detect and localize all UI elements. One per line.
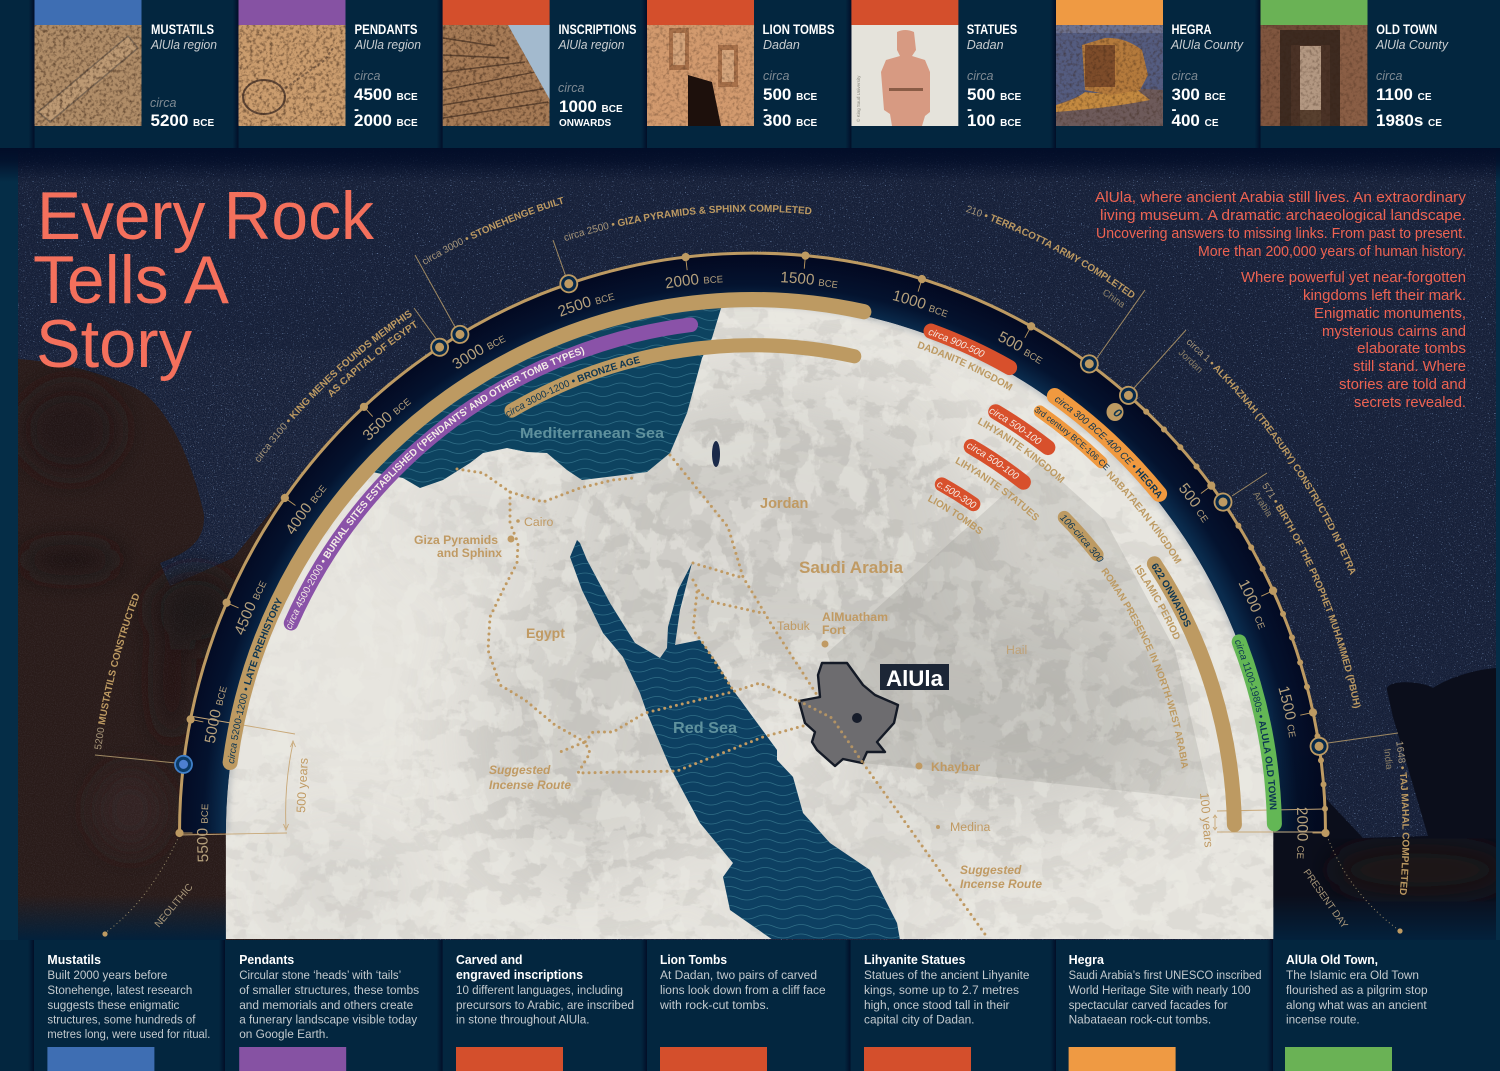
caption: Lihyanite Statues: capital city of Dadan. <box>864 1012 974 1026</box>
title <box>33 178 375 382</box>
route over region <box>799 701 863 763</box>
card: Lion Tombs: Dadan <box>763 38 800 52</box>
card: Hegra: HEGRA <box>1172 21 1212 37</box>
100 years scale marker <box>1197 792 1326 848</box>
era bar: Roman presence <box>1064 517 1097 555</box>
map labels: Suggested <box>489 763 551 777</box>
map labels: AlMuatham <box>822 610 888 624</box>
map labels: Jordan <box>760 496 808 512</box>
era bar labels: NABATAEAN KINGDOM <box>1104 470 1183 566</box>
caption: Pendants: Circular stone ‘heads’ with ‘tails’ <box>239 968 401 982</box>
photo: pendant <box>238 25 346 126</box>
year labels on band: 500 BCE <box>998 331 1043 364</box>
card: Pendants: circa <box>354 69 380 83</box>
100-year dots, common era <box>1142 407 1328 812</box>
era bar labels <box>226 327 1278 810</box>
caption: Lihyanite Statues: kings, some up to 2.7 metres <box>864 983 1019 997</box>
year zero badge <box>1106 403 1125 421</box>
caption: Carved and engraved inscriptions: engraved inscriptions <box>456 968 583 982</box>
year labels on band: 1500 BCE <box>781 272 838 288</box>
photo: mustatil <box>34 25 142 126</box>
card: Old Town: circa <box>1376 69 1402 83</box>
event node: circa 1 Alkhaznah <box>1116 383 1140 407</box>
year labels on band: 2000 CE <box>1296 808 1308 859</box>
intro text: living museum. A dramatic archaeological landscape. <box>1100 207 1466 224</box>
intro text: stories are told and <box>1339 376 1466 393</box>
event node: 5200 BCE Mustatils <box>174 755 193 774</box>
event node: 2500 BCE Giza <box>558 273 580 295</box>
event node: 1648 Taj Mahal <box>1309 736 1329 756</box>
neolithic end dot <box>102 931 108 937</box>
caption: Lion Tombs: At Dadan, two pairs of carved <box>660 968 817 982</box>
card: Old Town <box>1260 0 1449 130</box>
era bar labels: circa 500-100 <box>987 405 1043 448</box>
world event labels: China <box>1103 290 1124 308</box>
map: land and seas <box>226 307 1274 939</box>
Red Sea <box>570 540 900 940</box>
leader lines from nodes to outer labels <box>95 240 1398 763</box>
intro text: still stand. Where <box>1353 358 1466 375</box>
caption: Pendants: and memorials and others create <box>239 998 413 1012</box>
timeline arc group <box>174 196 1410 896</box>
present-day dotted lead-out <box>1327 836 1400 931</box>
map labels: Saudi Arabia <box>799 558 904 577</box>
title: Tells A <box>33 242 230 318</box>
era bar labels: 106-circa 300 <box>1057 512 1105 565</box>
map labels: Incense Route <box>489 778 571 792</box>
map labels: Giza Pyramids <box>414 533 498 547</box>
year labels on band: 5000 BCE <box>204 686 227 743</box>
caption: Mustatils: structures, some hundreds of <box>47 1012 196 1026</box>
caption: Hegra: Saudi Arabia’s first UNESCO inscribed <box>1069 968 1262 982</box>
caption: Carved and engraved inscriptions: 10 different languages, including <box>456 983 623 997</box>
photo: statue <box>851 25 958 126</box>
world event labels: circa 1 • ALKHAZNAH (TREASURY) CONSTRUCTED IN PETRA <box>1186 340 1356 575</box>
era bar labels: circa 5200-1200 • LATE PREHISTORY <box>226 596 286 764</box>
intro text: mysterious cairns and <box>1322 323 1466 340</box>
card: Hegra: 400 CE <box>1172 111 1219 130</box>
card: Pendants: 2000 BCE <box>354 111 418 130</box>
card: Hegra <box>1056 0 1244 130</box>
card: Lion Tombs: circa <box>763 69 789 83</box>
map labels: Incense Route <box>960 877 1042 891</box>
caption: Hegra: World Heritage Site with nearly 100 <box>1069 983 1251 997</box>
era bar: Islamic period <box>1154 564 1234 824</box>
caption: AlUla Old Town: flourished as a pilgrim stop <box>1286 983 1428 997</box>
world event labels: 210 • TERRACOTTA ARMY COMPLETED <box>966 206 1134 298</box>
caption: AlUla Old Town <box>1285 953 1428 1071</box>
year labels on band: 500 CE <box>1180 482 1208 523</box>
card: Hegra: AlUla County <box>1170 38 1244 52</box>
card: Statues: circa <box>967 69 993 83</box>
era bar: Hegra <box>1055 396 1159 494</box>
caption: Hegra: spectacular carved facades for <box>1069 998 1228 1012</box>
era bar labels: c.500-300 <box>935 479 978 512</box>
caption: Lion Tombs <box>659 953 826 1071</box>
title: Every Rock <box>37 178 375 254</box>
map labels: Egypt <box>526 625 565 641</box>
card: Pendants: 4500 BCE <box>354 85 418 104</box>
event node: 571 Birth of the Prophet <box>1211 490 1235 514</box>
wedge: fan of light grey east of AlUla <box>827 462 1210 800</box>
world event labels: circa 2500 • GIZA PYRAMIDS & SPHINX COMPLETED <box>564 204 812 241</box>
card: Mustatils: AlUla region <box>150 38 217 52</box>
caption: Carved and engraved inscriptions: precursors to Arabic, are inscribed <box>456 998 634 1012</box>
caption: Mustatils: Stonehenge, latest research <box>47 983 193 997</box>
caption: Lihyanite Statues: Lihyanite Statues <box>864 953 965 967</box>
era bar labels: LION TOMBS <box>926 494 985 537</box>
world event labels: 1648 • TAJ MAHAL COMPLETED <box>1393 740 1410 896</box>
map labels: Mediterranean Sea <box>520 425 665 442</box>
caption: Lion Tombs: with rock-cut tombs. <box>659 998 769 1012</box>
photo: statue: © King Saud University <box>855 75 861 122</box>
era bar: AlUla Old Town <box>1239 642 1274 824</box>
night sky background <box>0 148 1500 940</box>
card: Pendants <box>238 0 421 130</box>
year labels on band: 1000 BCE <box>892 290 948 318</box>
era bar: Bronze Age <box>512 345 854 411</box>
caption: Lion Tombs: lions look down from a cliff face <box>660 983 826 997</box>
card: Pendants: - <box>354 101 359 118</box>
map labels: Tabuk <box>777 619 811 633</box>
event node: 3000 BCE Stonehenge <box>448 323 472 346</box>
outer arc <box>180 253 1326 833</box>
map labels: Fort <box>822 623 846 637</box>
world event labels: India <box>1381 748 1394 771</box>
photo: lion tombs <box>647 25 754 126</box>
caption: AlUla Old Town: incense route. <box>1286 1012 1360 1026</box>
label: 5200 Mustatils constructed: 5200 MUSTATILS CONSTRUCTED <box>94 594 139 750</box>
world event labels <box>253 196 1410 896</box>
card: Inscriptions: AlUla region <box>558 38 625 52</box>
caption: Hegra: Hegra <box>1069 953 1105 967</box>
map labels: Medina <box>950 820 990 834</box>
caption: AlUla Old Town: AlUla Old Town, <box>1286 953 1378 967</box>
caption: AlUla Old Town: along what was an ancient <box>1286 998 1427 1012</box>
caption: Mustatils <box>47 953 210 1071</box>
world event labels: AS CAPITAL OF EGYPT <box>328 320 417 398</box>
card: Inscriptions: ONWARDS <box>559 118 612 129</box>
era bar labels: ROMAN PRESENCE IN NORTH-WEST ARABIA <box>1099 566 1190 769</box>
card: Old Town: AlUla County <box>1375 38 1449 52</box>
map labels: and Sphinx <box>437 546 502 560</box>
card: Hegra: circa <box>1172 69 1198 83</box>
world event labels: Jordan <box>1178 350 1202 373</box>
500-year tick marks <box>176 252 1329 837</box>
era bar: Burial sites <box>291 325 691 623</box>
era bar: Late Prehistory <box>230 300 864 762</box>
500 years scale marker <box>179 716 311 835</box>
caption: Carved and engraved inscriptions <box>456 953 634 1071</box>
card: Statues: Dadan <box>967 38 1004 52</box>
caption: Mustatils: suggests these enigmatic <box>47 998 179 1012</box>
year labels on band: 2500 BCE <box>558 293 615 317</box>
year labels on band: 5500 BCE <box>196 804 208 862</box>
era bar labels: circa 900-500 <box>927 327 986 361</box>
card: Hegra: 300 BCE <box>1172 85 1226 104</box>
present-day end dot <box>1397 928 1403 934</box>
era bar labels: LIHYANITE STATUES <box>953 456 1041 524</box>
map labels: Cairo <box>524 515 554 529</box>
card: Lion Tombs <box>647 0 834 130</box>
label: Present Day: PRESENT DAY <box>1301 867 1350 931</box>
card: Inscriptions <box>443 0 636 129</box>
caption: Mustatils: metres long, were used for ritual. <box>47 1027 210 1041</box>
incense routes <box>457 455 987 937</box>
card: Old Town: 1980s CE <box>1376 111 1442 130</box>
card: Old Town: - <box>1376 101 1381 118</box>
top row panel background <box>0 0 1500 148</box>
Mediterranean Sea <box>374 308 722 488</box>
card: Pendants: PENDANTS <box>354 21 418 37</box>
Dead Sea <box>712 441 720 467</box>
intro text <box>1095 189 1467 411</box>
caption: Lion Tombs: Lion Tombs <box>660 953 727 967</box>
card: Inscriptions: 1000 BCE <box>559 97 623 116</box>
world event labels: circa 3100 • KING MENES FOUNDS MEMPHIS <box>256 310 412 462</box>
intro text: More than 200,000 years of human history. <box>1198 243 1466 260</box>
intro text: kingdoms left their mark. <box>1303 287 1466 304</box>
intro text: Enigmatic monuments, <box>1314 305 1466 322</box>
rocks: left silhouette <box>18 350 348 940</box>
AlUla region shape <box>799 663 898 766</box>
timeline band <box>180 253 1326 833</box>
card: Statues: - <box>967 101 972 118</box>
card: Inscriptions: INSCRIPTIONS <box>558 21 636 37</box>
world event labels: circa 3000 • STONEHENGE BUILT <box>423 196 563 264</box>
caption: Pendants: on Google Earth. <box>239 1027 329 1041</box>
card: Mustatils: MUSTATILS <box>151 21 214 37</box>
year labels on band: 2000 BCE <box>666 274 723 288</box>
map labels: Hail <box>1006 643 1027 657</box>
intro text: elaborate tombs <box>1357 340 1466 357</box>
era bar labels: LIHYANITE KINGDOM <box>976 416 1066 486</box>
100 years scale marker: 100 years <box>1197 792 1216 848</box>
year labels on band <box>195 269 1310 863</box>
caption: Hegra <box>1069 953 1262 1071</box>
caption: Pendants <box>239 953 419 1071</box>
caption: Carved and engraved inscriptions: Carved and <box>456 953 522 967</box>
label: Neolithic: NEOLITHIC <box>153 882 196 930</box>
year labels on band: 4500 BCE <box>236 580 266 635</box>
caption: AlUla Old Town: The Islamic era Old Town <box>1286 968 1419 982</box>
map labels: Suggested <box>960 863 1022 877</box>
intro text: AlUla, where ancient Arabia still lives. An extraordinary <box>1095 189 1467 206</box>
event node: 210 BCE Terracotta Army <box>1077 352 1101 376</box>
disc rim shading <box>226 303 1273 833</box>
year zero badge: 0 <box>1111 405 1125 421</box>
era bar: Lion Tombs <box>942 484 973 504</box>
caption: Carved and engraved inscriptions: in stone throughout AlUla. <box>456 1012 590 1026</box>
event node: 3100 BCE Memphis <box>428 335 451 359</box>
world event labels: Arabia <box>1252 492 1271 518</box>
era bar labels: circa 500-100 <box>965 440 1021 483</box>
card: Statues: 100 BCE <box>967 111 1022 130</box>
neolithic dotted lead-in <box>105 836 179 933</box>
card: Lion Tombs: - <box>763 101 768 118</box>
era bar labels: DADANITE KINGDOM <box>916 340 1014 394</box>
card: Hegra: - <box>1172 101 1176 118</box>
era bar labels: circa 3000-1200 • BRONZE AGE <box>504 355 642 420</box>
card: Statues: 500 BCE <box>967 85 1022 104</box>
era bar labels: 622 ONWARDS <box>1149 561 1193 630</box>
caption: Lihyanite Statues: high, once stood tall in their <box>864 998 1010 1012</box>
card: Statues <box>851 0 1022 130</box>
map labels <box>414 425 1042 891</box>
caption: Hegra: Nabataean rock-cut tombs. <box>1069 1012 1211 1026</box>
year labels on band: 3500 BCE <box>363 398 412 440</box>
year labels on band: 1500 CE <box>1278 686 1296 738</box>
era bar: Lihyanite Statues <box>971 447 1023 482</box>
card: Inscriptions: circa <box>558 81 584 95</box>
500 years scale marker: 500 years <box>294 758 311 813</box>
year labels on band: 1000 CE <box>1238 580 1265 630</box>
era bar: Nabataean Kingdom <box>1040 412 1101 462</box>
photo: Hegra tomb <box>1056 25 1163 126</box>
card: Mustatils: circa <box>150 96 176 110</box>
title: Story <box>36 306 192 382</box>
world event labels: 571 • BIRTH OF THE PROPHET MUHAMMED (PBUH) <box>1262 482 1361 708</box>
photo: old town alley <box>1260 25 1368 126</box>
card: Mustatils: 5200 BCE <box>150 111 214 130</box>
intro text: Where powerful yet near-forgotten <box>1241 269 1466 286</box>
card: Lion Tombs: 500 BCE <box>763 85 818 104</box>
caption: Pendants: Pendants <box>239 953 294 967</box>
era bar: Lihyanite Kingdom <box>996 412 1048 448</box>
map labels: Red Sea <box>673 720 737 737</box>
caption: Mustatils: Built 2000 years before <box>47 968 168 982</box>
caption: Pendants: a funerary landscape visible today <box>239 1012 418 1026</box>
photo: inscribed rock <box>443 25 550 126</box>
caption: Pendants: of smaller structures, these tombs <box>239 983 419 997</box>
era bar labels: ISLAMIC PERIOD <box>1132 564 1182 642</box>
AlUla location dot <box>852 713 862 723</box>
era bar labels: 3rd century BCE-106 CE <box>1033 404 1112 472</box>
card: Lion Tombs: LION TOMBS <box>762 21 834 37</box>
era bar labels: circa 4500-2000 • BURIAL SITES ESTABLISHED (‘PENDANTS’ AND OTHER TOMB TYPES) <box>284 345 586 631</box>
map labels: Khaybar <box>931 760 980 774</box>
bottom fade of sky <box>18 895 1496 940</box>
bottom row panel background <box>0 940 1500 1071</box>
AlUla label: AlUla <box>886 666 944 691</box>
card: Lion Tombs: 300 BCE <box>763 111 818 130</box>
era bar labels: circa 1100-1980s • ALULA OLD TOWN <box>1232 638 1278 810</box>
caption: Mustatils: Mustatils <box>47 953 101 967</box>
era bar labels: circa 300 BCE-400 CE • HEGRA <box>1052 394 1164 501</box>
rocks: right silhouette <box>1270 668 1500 940</box>
card: Pendants: AlUla region <box>354 38 421 52</box>
intro text: secrets revealed. <box>1354 394 1466 411</box>
card: Old Town: OLD TOWN <box>1376 21 1437 37</box>
era bar: Dadanite Kingdom <box>931 331 1010 367</box>
year labels on band: 3000 BCE <box>452 335 506 368</box>
card: Statues: STATUES <box>967 21 1017 37</box>
year labels on band: 4000 BCE <box>287 484 327 534</box>
intro text: Uncovering answers to missing links. From past to present. <box>1096 225 1466 242</box>
caption: Lihyanite Statues: Statues of the ancient Lihyanite <box>864 968 1030 982</box>
card: Mustatils <box>34 0 217 130</box>
caption: Lihyanite Statues <box>864 953 1030 1071</box>
card: Old Town: 1100 CE <box>1376 85 1432 104</box>
